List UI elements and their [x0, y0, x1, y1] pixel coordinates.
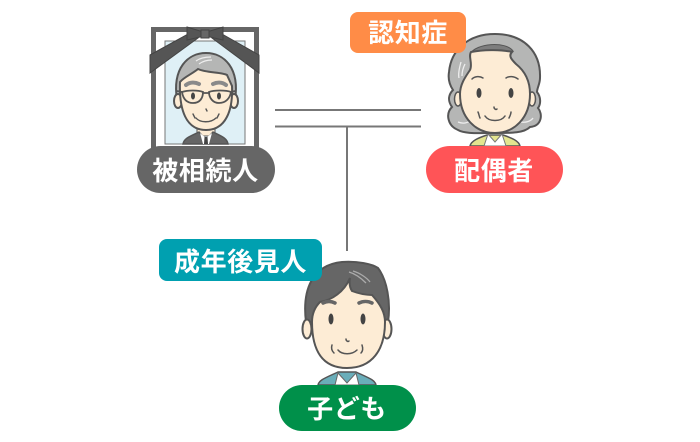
elder man mouth	[193, 109, 219, 122]
child eyebrows	[323, 302, 372, 303]
label pill: spouse: 配偶者	[454, 156, 534, 186]
elder man ears	[174, 94, 238, 108]
elder man neck	[197, 124, 215, 136]
tag: guardian	[159, 239, 322, 281]
funeral frame	[154, 30, 256, 160]
label pill: deceased	[137, 146, 275, 193]
family relation lines	[275, 110, 421, 251]
elder man eyebrows	[186, 83, 226, 85]
elder man suit	[183, 132, 228, 144]
child ears	[302, 320, 392, 338]
spouse clothing	[470, 135, 520, 146]
child mouth	[332, 339, 363, 354]
portrait: spouse elderly woman	[448, 34, 541, 146]
elder man shirt and tie	[200, 133, 212, 144]
tag: guardian: 成年後見人	[174, 247, 307, 277]
label pill: spouse	[426, 146, 563, 193]
spouse face	[460, 50, 530, 133]
child hair highlight	[349, 271, 370, 283]
tag: dementia	[350, 12, 466, 53]
label pill: child	[279, 385, 416, 431]
child hair	[305, 262, 389, 322]
spouse parting	[470, 45, 513, 54]
elder man eyes	[191, 92, 221, 100]
black mourning ribbon	[150, 27, 259, 73]
child jacket	[318, 372, 376, 385]
spouse hair	[448, 34, 541, 133]
portrait: deceased in funeral frame	[150, 27, 259, 160]
elder man face	[180, 69, 232, 130]
spouse eyes	[476, 88, 514, 98]
tag: dementia: 認知症	[368, 18, 448, 48]
child collar	[335, 373, 359, 385]
spouse hair highlights	[458, 62, 533, 123]
portrait: child, guardian	[302, 262, 392, 385]
elder man hair	[176, 53, 236, 100]
spouse ears	[454, 92, 536, 106]
elder man glasses	[177, 90, 235, 103]
label pill: deceased: 被相続人	[152, 156, 259, 186]
label pill: child: 子ども	[307, 394, 387, 424]
spouse eyebrows	[472, 77, 518, 79]
child face	[312, 278, 385, 368]
elder man hair highlight	[196, 57, 212, 64]
child eyes	[328, 314, 366, 324]
spouse collar	[484, 134, 506, 146]
spouse mouth	[478, 107, 511, 120]
